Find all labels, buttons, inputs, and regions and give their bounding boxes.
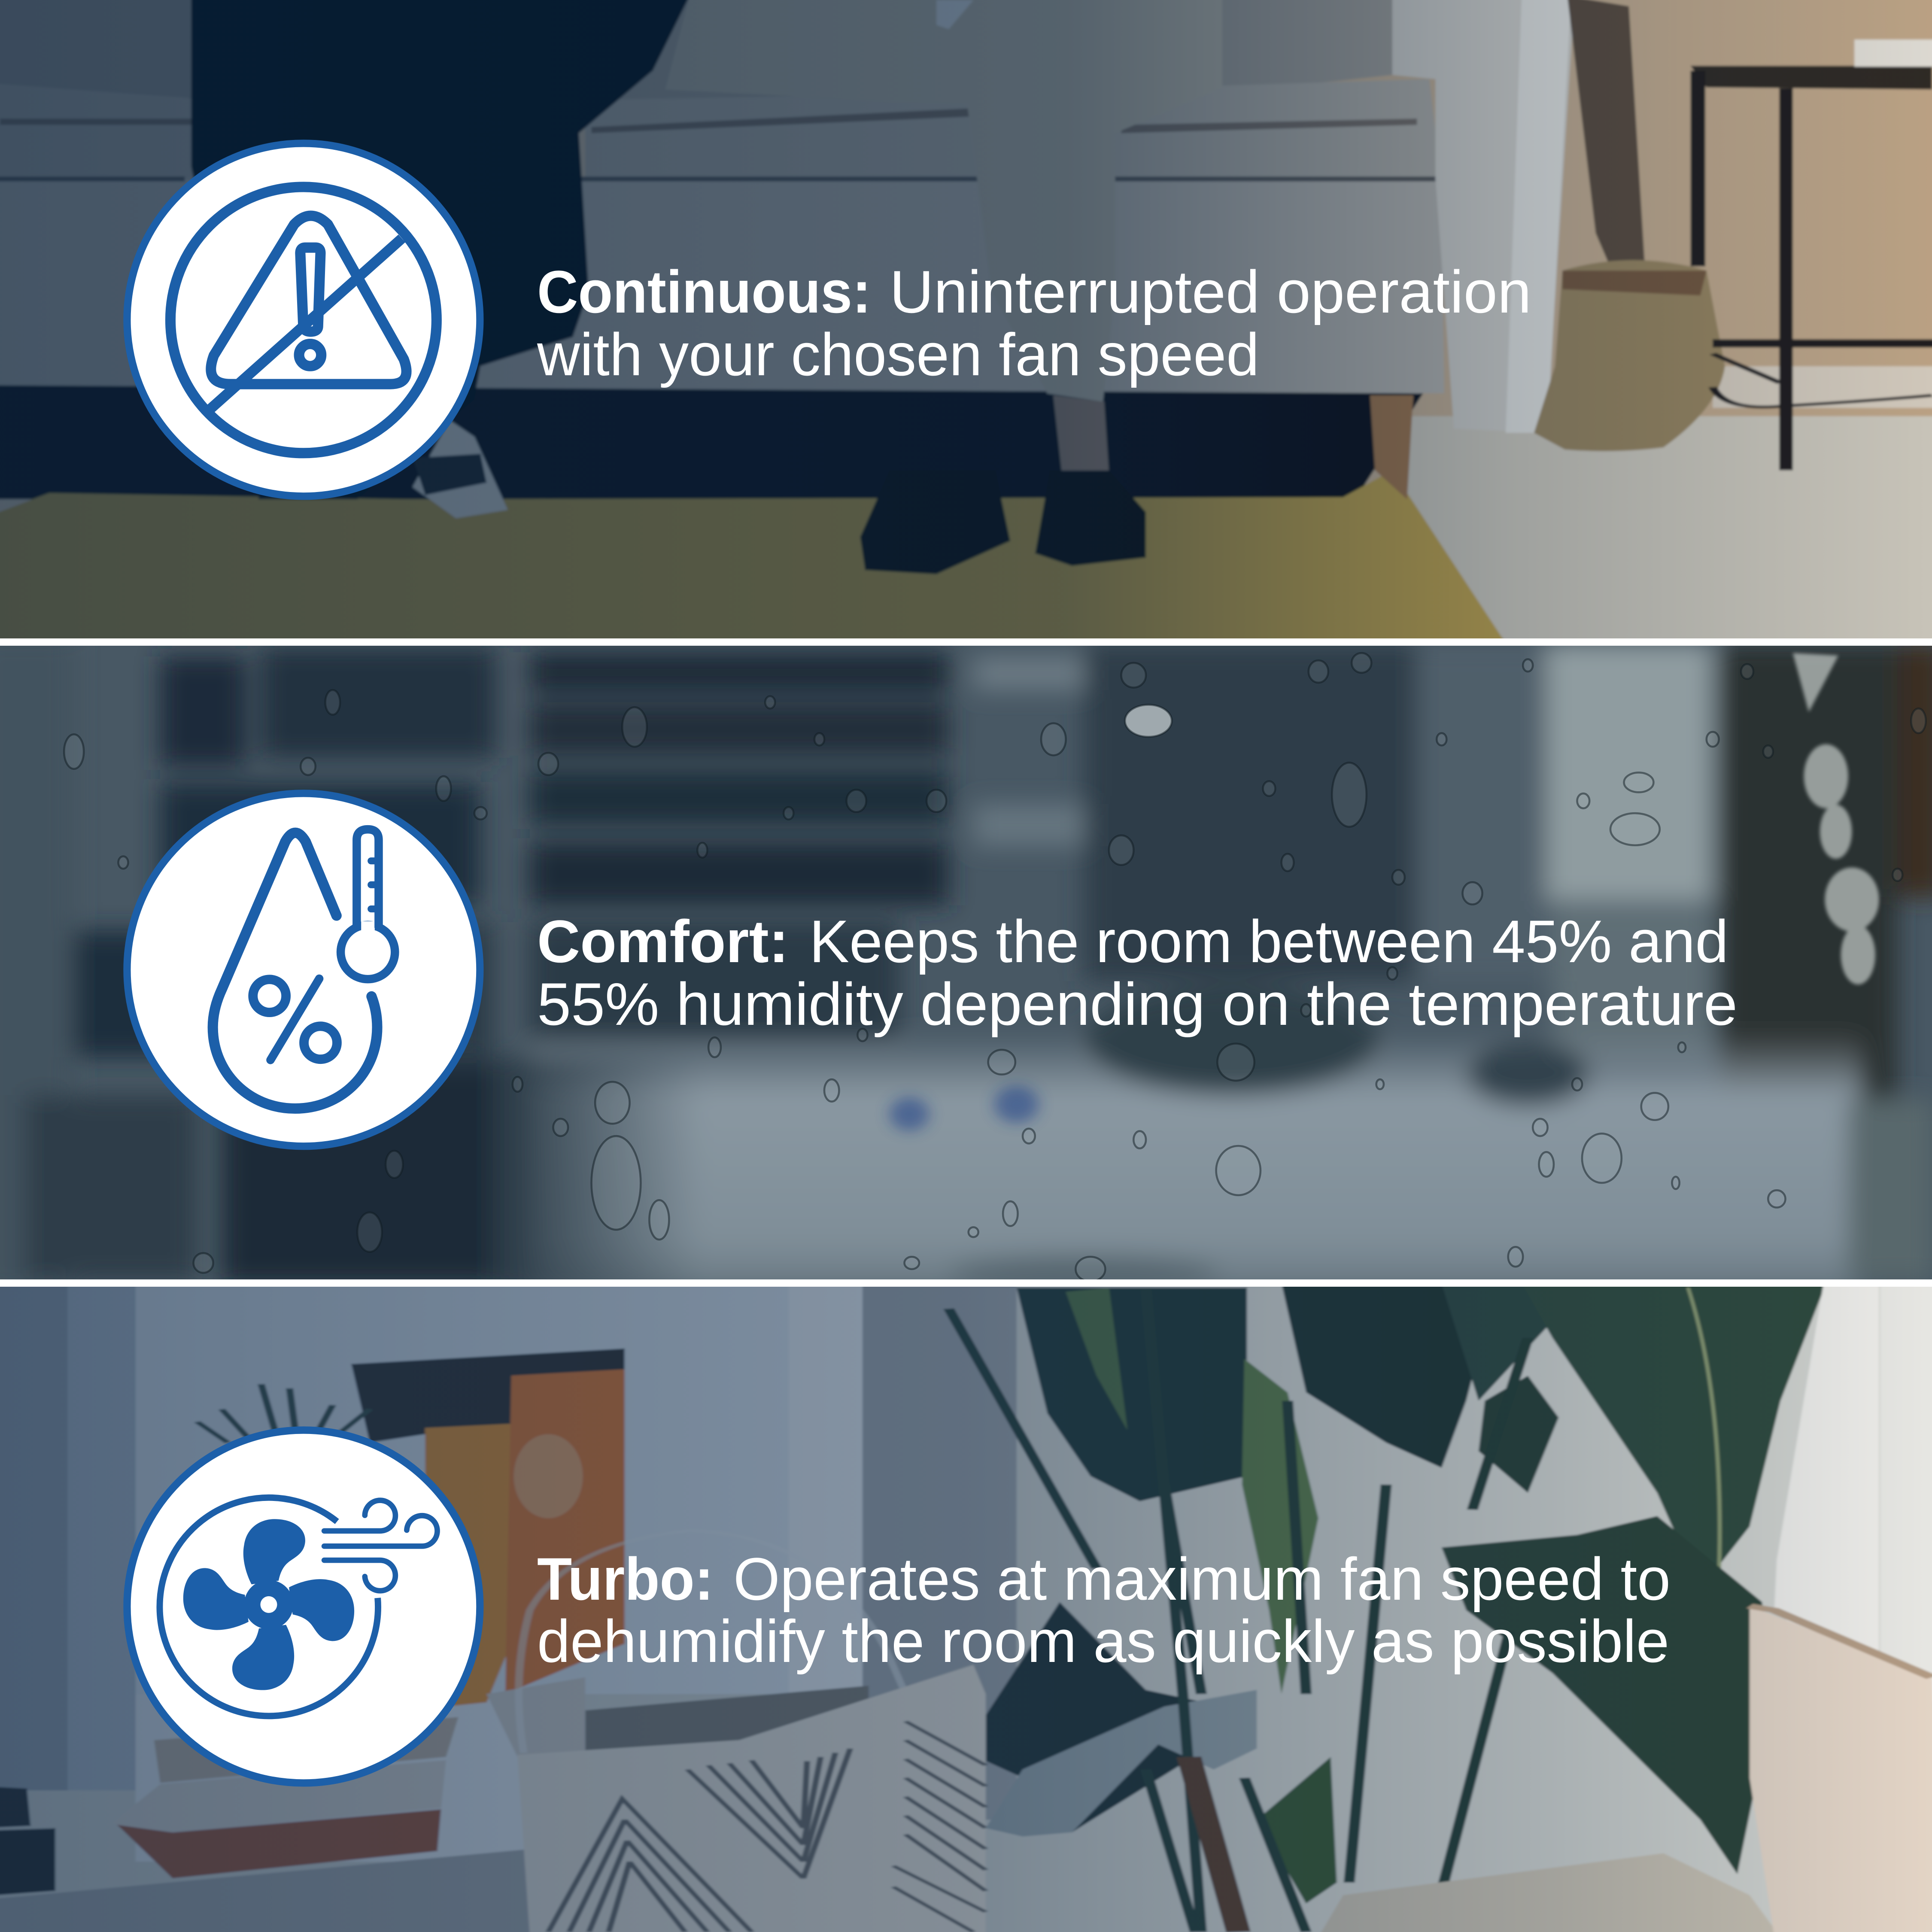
text block: continuous mode — [537, 258, 1531, 388]
icon: continuous mode, crossed-out warning triangle — [127, 143, 480, 496]
text block: continuous mode: Uninterrupted operation — [890, 258, 1531, 325]
text block: turbo mode: dehumidify the room as quickly as possible — [537, 1607, 1669, 1675]
panel: turbo mode living room background — [0, 1273, 1932, 1932]
text block: turbo mode: Operates at maximum fan speed to — [733, 1545, 1671, 1613]
icon: comfort mode, humidity drop with thermometer — [127, 793, 480, 1146]
text block: turbo mode — [537, 1545, 1671, 1675]
text block: comfort mode — [537, 908, 1738, 1038]
panel: continuous mode photo background — [0, 0, 1932, 664]
text block: comfort mode: Comfort: — [537, 908, 789, 975]
text block: comfort mode: Keeps the room between 45% and — [809, 908, 1728, 975]
text block: comfort mode: 55% humidity depending on the temperature — [537, 970, 1738, 1038]
text block: continuous mode: with your chosen fan speed — [537, 321, 1259, 388]
panel: comfort mode rainy window background — [0, 635, 1932, 1310]
text block: continuous mode: Continuous: — [537, 258, 871, 325]
text block: turbo mode: Turbo: — [537, 1545, 714, 1613]
icon: turbo mode, fan with wind — [127, 1430, 480, 1783]
